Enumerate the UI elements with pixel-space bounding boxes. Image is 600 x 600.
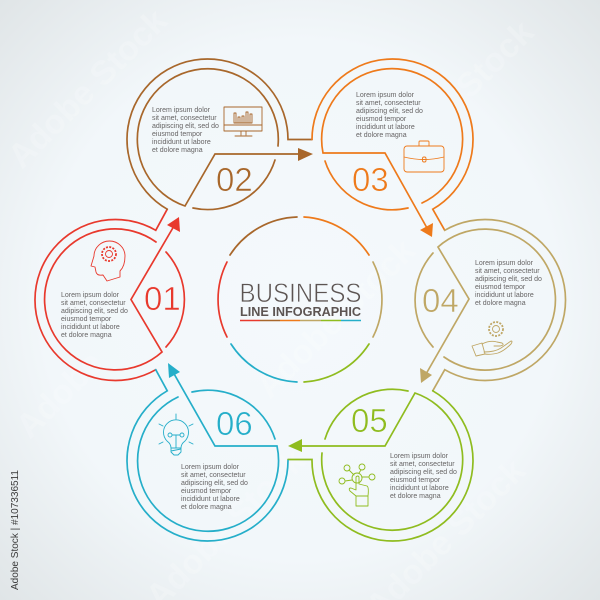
- number 06: 06: [216, 405, 253, 442]
- text block 02: adipiscing elit, sed do: [152, 123, 219, 130]
- text block 01: incididunt ut labore: [61, 324, 120, 331]
- icon: touch network: [339, 464, 375, 506]
- panel: step 06 blue: [127, 363, 288, 541]
- text block 02: et dolore magna: [152, 147, 203, 154]
- text block 03: sit amet, consectetur: [356, 100, 421, 107]
- text block 02: Lorem ipsum dolor: [152, 107, 211, 114]
- subtitle: LINE INFOGRAPHIC: [240, 304, 362, 319]
- text block 03: incididunt ut labore: [356, 124, 415, 131]
- text block 04: eiusmod tempor: [475, 284, 526, 291]
- text block 01: eiusmod tempor: [61, 316, 112, 323]
- title: BUSINESS: [240, 278, 362, 308]
- text block 01: Lorem ipsum dolor: [61, 292, 120, 299]
- text block 04: sit amet, consectetur: [475, 268, 540, 275]
- text block 03: Lorem ipsum dolor: [356, 92, 415, 99]
- text block 06: eiusmod tempor: [181, 488, 232, 495]
- text block 04: incididunt ut labore: [475, 292, 534, 299]
- text block 06: adipiscing elit, sed do: [181, 480, 248, 487]
- outer ring green: [288, 391, 473, 541]
- arrowhead green: [288, 439, 302, 452]
- outer ring orange: [312, 59, 473, 230]
- arrowhead brown: [298, 148, 313, 161]
- text block 04: Lorem ipsum dolor: [475, 260, 534, 267]
- text block 03: adipiscing elit, sed do: [356, 108, 423, 115]
- text block 03: et dolore magna: [356, 132, 407, 139]
- text block 01: sit amet, consectetur: [61, 300, 126, 307]
- stock id label: Adobe Stock | #107336511: [9, 470, 21, 590]
- panel: step 05 green: [288, 389, 473, 541]
- center ring: [218, 217, 382, 382]
- number 02: 02: [216, 161, 253, 198]
- text block 05: eiusmod tempor: [390, 477, 441, 484]
- watermark: Stock: [449, 13, 541, 106]
- text block 05: incididunt ut labore: [390, 485, 449, 492]
- panel: step 01 red: [35, 209, 184, 381]
- inner ring and arrow line green: [300, 389, 463, 530]
- text block 03: [356, 92, 423, 139]
- icon: monitor bar chart: [224, 107, 262, 136]
- text block 04: et dolore magna: [475, 300, 526, 307]
- text block 05: et dolore magna: [390, 493, 441, 500]
- title underline: [240, 320, 361, 322]
- panel: step 03 orange: [312, 59, 473, 237]
- text block 06: Lorem ipsum dolor: [181, 464, 240, 471]
- arrowhead orange: [420, 223, 433, 237]
- outer ring blue: [127, 370, 288, 541]
- number 01: 01: [144, 280, 181, 317]
- icon: light bulb: [159, 414, 193, 455]
- arrowhead tan: [420, 368, 432, 383]
- text block 01: [61, 292, 128, 339]
- text block 02: [152, 107, 219, 154]
- inner ring and arrow line red: [45, 226, 184, 370]
- text block 06: [181, 464, 248, 511]
- text block 01: et dolore magna: [61, 332, 112, 339]
- text block 03: eiusmod tempor: [356, 116, 407, 123]
- text block 02: incididunt ut labore: [152, 139, 211, 146]
- text block 05: Lorem ipsum dolor: [390, 453, 449, 460]
- text block 04: adipiscing elit, sed do: [475, 276, 542, 283]
- text block 05: adipiscing elit, sed do: [390, 469, 457, 476]
- arrowhead blue: [168, 363, 180, 378]
- watermark: Adobe Stock: [249, 232, 423, 406]
- text block 06: sit amet, consectetur: [181, 472, 246, 479]
- icon: head with gear: [91, 241, 125, 281]
- text block 05: sit amet, consectetur: [390, 461, 455, 468]
- panel: step 04 tan: [415, 220, 566, 391]
- text block 01: adipiscing elit, sed do: [61, 308, 128, 315]
- inner ring and arrow line orange: [322, 69, 463, 228]
- text block 04: [475, 260, 542, 307]
- arrowhead red: [167, 217, 180, 232]
- watermark: Adobe Stock: [1, 2, 175, 176]
- text block 02: sit amet, consectetur: [152, 115, 217, 122]
- inner ring and arrow line tan: [415, 229, 555, 374]
- panel: step 02 brown: [127, 59, 313, 210]
- text block 06: et dolore magna: [181, 504, 232, 511]
- number 03: 03: [352, 161, 389, 198]
- text block 05: [390, 453, 457, 500]
- text block 06: incididunt ut labore: [181, 496, 240, 503]
- inner ring and arrow line blue: [138, 372, 279, 531]
- watermark: Adobe: [9, 344, 110, 446]
- icon: briefcase: [404, 141, 444, 172]
- outer ring brown: [127, 59, 312, 209]
- icon: hand with gear: [472, 322, 512, 356]
- number 05: 05: [351, 402, 388, 439]
- outer ring red: [35, 209, 167, 381]
- number 04: 04: [422, 282, 459, 319]
- inner ring and arrow line brown: [137, 69, 300, 210]
- text block 02: eiusmod tempor: [152, 131, 203, 138]
- outer ring tan: [433, 220, 566, 391]
